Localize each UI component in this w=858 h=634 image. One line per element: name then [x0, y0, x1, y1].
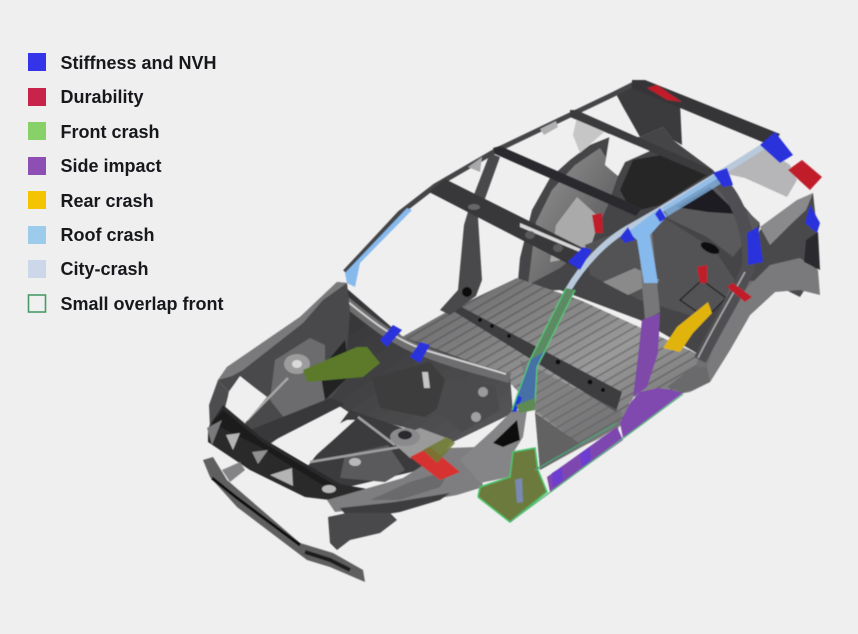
- cowl tube: [340, 297, 510, 378]
- far roof rail: [345, 83, 636, 272]
- durability zones: [592, 85, 822, 302]
- legend item: Stiffness and NVH: Stiffness and NVH: [60, 53, 217, 73]
- front crash member: [303, 347, 380, 382]
- cabin floor: [402, 278, 700, 470]
- roof cross bar 3: [570, 110, 712, 176]
- near B-pillar: [622, 232, 660, 428]
- front left opening: [228, 377, 267, 423]
- legend item: Front crash: Front crash: [60, 122, 160, 142]
- legend item: Side impact: Side impact: [60, 156, 162, 176]
- legend item: Small overlap front: Small overlap front: [60, 294, 224, 314]
- front bumper beam: [203, 457, 365, 582]
- rear header: [632, 80, 780, 146]
- front centre opening: [285, 420, 355, 463]
- near side cowl body: [460, 410, 582, 483]
- stiffness zones: [380, 132, 820, 363]
- durability and overlap front zone: [410, 437, 460, 480]
- roof cross bar 2: [493, 146, 642, 216]
- quarter panel: [718, 145, 797, 197]
- near lower rail: [327, 447, 483, 520]
- near roof rail: [568, 146, 764, 290]
- engine bay centre: [305, 410, 440, 490]
- side impact sill: [510, 388, 683, 522]
- far front corner post: [209, 380, 245, 432]
- rear crash zone: [663, 302, 712, 352]
- lower bracket: [328, 513, 397, 550]
- far side B-pillar: [440, 153, 500, 315]
- rear interior wall: [517, 117, 760, 355]
- cowl tube highlight: [342, 297, 506, 374]
- dash panel and firewall: [300, 287, 513, 442]
- legend item: Durability: Durability: [60, 87, 144, 107]
- radiator cross member: [207, 405, 400, 500]
- legend: [28, 53, 224, 314]
- car body structure: [203, 80, 822, 582]
- A-pillar green crash strip: [512, 288, 575, 413]
- roof crash zones: [345, 174, 722, 287]
- near strut tower: [390, 428, 452, 462]
- front crash lower zone: [478, 423, 617, 522]
- near rear pillar: [698, 180, 749, 360]
- far engine bay wing: [218, 282, 350, 450]
- rear upper block: [615, 80, 682, 145]
- legend item: Roof crash: Roof crash: [60, 225, 155, 245]
- windshield header bar: [429, 179, 583, 268]
- legend item: Rear crash: Rear crash: [60, 191, 154, 211]
- rear quarter lower: [667, 193, 820, 393]
- legend item: City-crash: City-crash: [60, 259, 149, 279]
- far roof highlights: [468, 121, 558, 172]
